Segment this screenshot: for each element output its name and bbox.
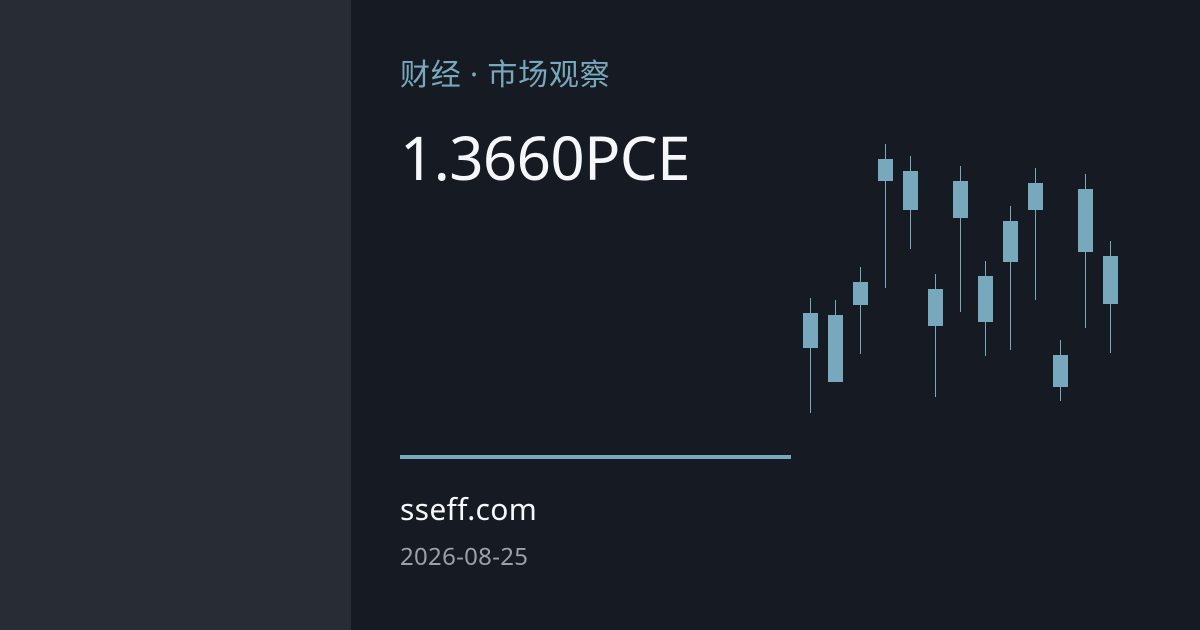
- title: 1.3660PCE: [400, 116, 690, 198]
- date: 2026-08-25: [400, 540, 528, 573]
- category label: 财经 · 市场观察: [400, 53, 610, 94]
- panel: left sidebar: [0, 0, 351, 630]
- site name: sseff.com: [400, 488, 537, 529]
- accent rule: [400, 455, 791, 459]
